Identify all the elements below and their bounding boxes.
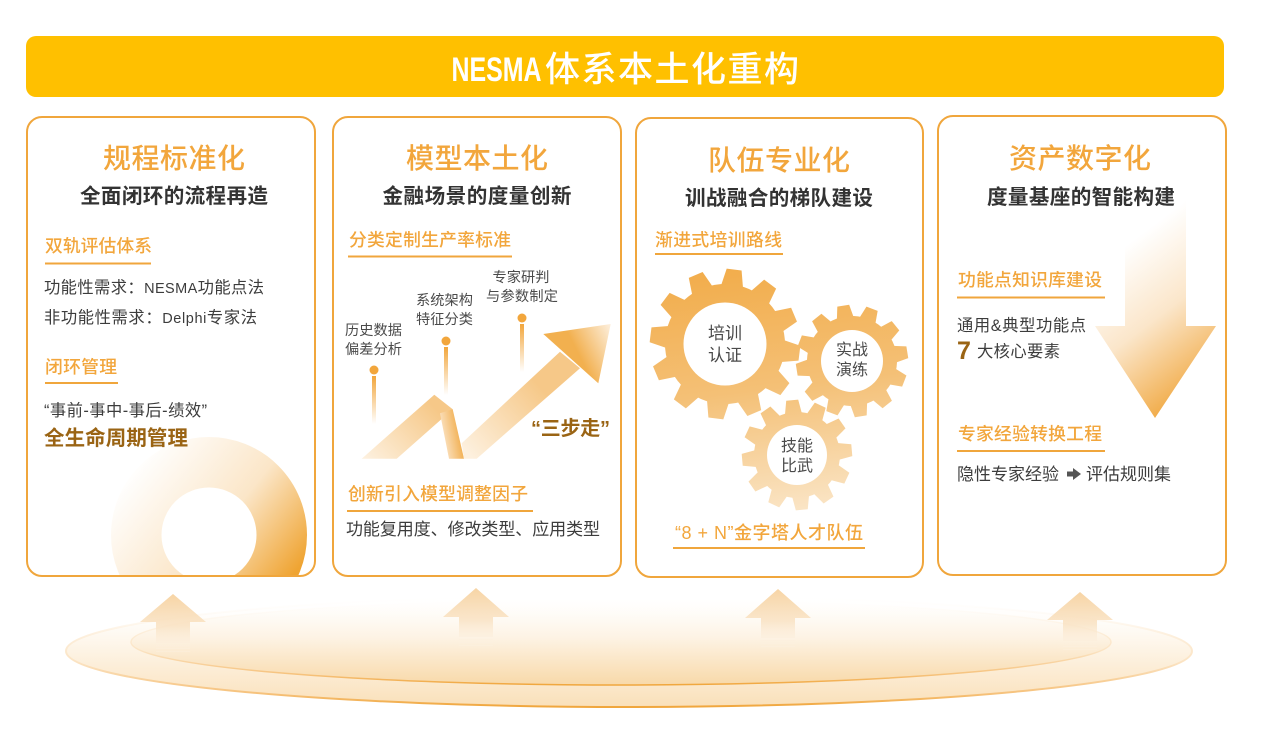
- gear: 技能比武: 比武: [781, 457, 813, 475]
- section: 8+N 金字塔人才队伍: “8 + N”金字塔人才队伍: [675, 523, 863, 543]
- panel: 模型本土化: [333, 117, 621, 576]
- subheading: 金融场景的度量创新: [382, 184, 572, 208]
- step 2 marker: 特征分类: [416, 312, 473, 328]
- title banner: 体系本土化重构: [545, 50, 799, 90]
- arrow: up 4: [1047, 592, 1113, 650]
- gear: 技能比武: 技能: [781, 437, 813, 455]
- step 3 marker: 与参数制定: [486, 288, 558, 305]
- arrow: up 2: [443, 588, 509, 646]
- section: 双轨评估体系: 双轨评估体系: [45, 236, 152, 256]
- text: 隐性专家经验: 隐性专家经验: [957, 465, 1059, 484]
- chart: three-step rising arrow: [362, 324, 611, 459]
- subheading: 全面闭环的流程再造: [80, 184, 268, 208]
- text: 事前事中事后绩效: “事前-事中-事后-绩效”: [44, 402, 207, 420]
- heading: 模型本土化: [406, 143, 548, 174]
- gear: 培训认证: [650, 268, 800, 420]
- text: 调整因子: 功能复用度、修改类型、应用类型: [346, 520, 600, 539]
- gear: 技能比武: [742, 400, 852, 510]
- step 1 marker: 偏差分析: [345, 342, 402, 358]
- step 3 marker: 专家研判: [492, 269, 550, 286]
- step 3 marker: [486, 269, 558, 372]
- section: 功能点知识库建设: 功能点知识库建设: [958, 270, 1102, 290]
- text: 通用典型功能点: 通用&典型功能点: [957, 317, 1086, 335]
- arrow: big down arrow: [1095, 183, 1216, 418]
- title banner: [26, 36, 1224, 97]
- step 2 marker: [416, 293, 473, 395]
- foundation platform with up arrows: [66, 588, 1192, 707]
- text: 7 大核心要素: 7: [957, 337, 971, 365]
- panel: 队伍专业化: [636, 118, 923, 577]
- gear: 实战演练: 实战: [836, 341, 868, 359]
- gear: 培训认证: 认证: [708, 346, 742, 365]
- text: 功能性需求: 功能性需求：NESMA功能点法: [44, 279, 264, 297]
- text: 评估规则集: 评估规则集: [1086, 465, 1171, 484]
- text: 7 大核心要素: [957, 337, 1060, 365]
- arrow: up 1: [140, 594, 206, 652]
- section: 专家经验转换工程: 专家经验转换工程: [958, 424, 1102, 444]
- platform: inner ellipse: [131, 599, 1111, 685]
- section: 创新引入模型调整因子: 创新引入模型调整因子: [348, 484, 528, 504]
- text: 7 大核心要素: 大核心要素: [977, 343, 1060, 361]
- title banner: NESMA: [452, 51, 542, 89]
- step 1 marker: 历史数据: [345, 323, 402, 339]
- heading: 资产数字化: [1009, 143, 1151, 174]
- heading: 规程标准化: [103, 143, 245, 174]
- callout: 三步走: “三步走”: [531, 417, 610, 440]
- step 2 marker: 系统架构: [416, 293, 473, 309]
- panel: 规程标准化: [27, 117, 315, 608]
- gear: 实战演练: 演练: [836, 361, 868, 379]
- section: 分类定制生产率标准: 分类定制生产率标准: [349, 230, 511, 250]
- gear: 实战演练: [796, 304, 908, 418]
- gear: 培训认证: 培训: [708, 324, 742, 343]
- section: 闭环管理: 闭环管理: [45, 357, 117, 377]
- heading: 队伍专业化: [708, 145, 850, 176]
- panel: 资产数字化: [938, 116, 1226, 575]
- donut graphic: [136, 462, 282, 608]
- subheading: 训战融合的梯队建设: [685, 187, 873, 210]
- icon: small right arrow: [1067, 468, 1081, 480]
- text: 非功能性需求: 非功能性需求：Delphi专家法: [44, 309, 257, 327]
- subheading: 度量基座的智能构建: [987, 185, 1175, 209]
- section: 渐进式培训路线: 渐进式培训路线: [655, 230, 782, 250]
- platform: outer ellipse: [66, 595, 1192, 707]
- step 1 marker: [345, 323, 402, 424]
- arrow: up 3: [745, 589, 811, 647]
- text: 全生命周期管理: 全生命周期管理: [44, 426, 188, 450]
